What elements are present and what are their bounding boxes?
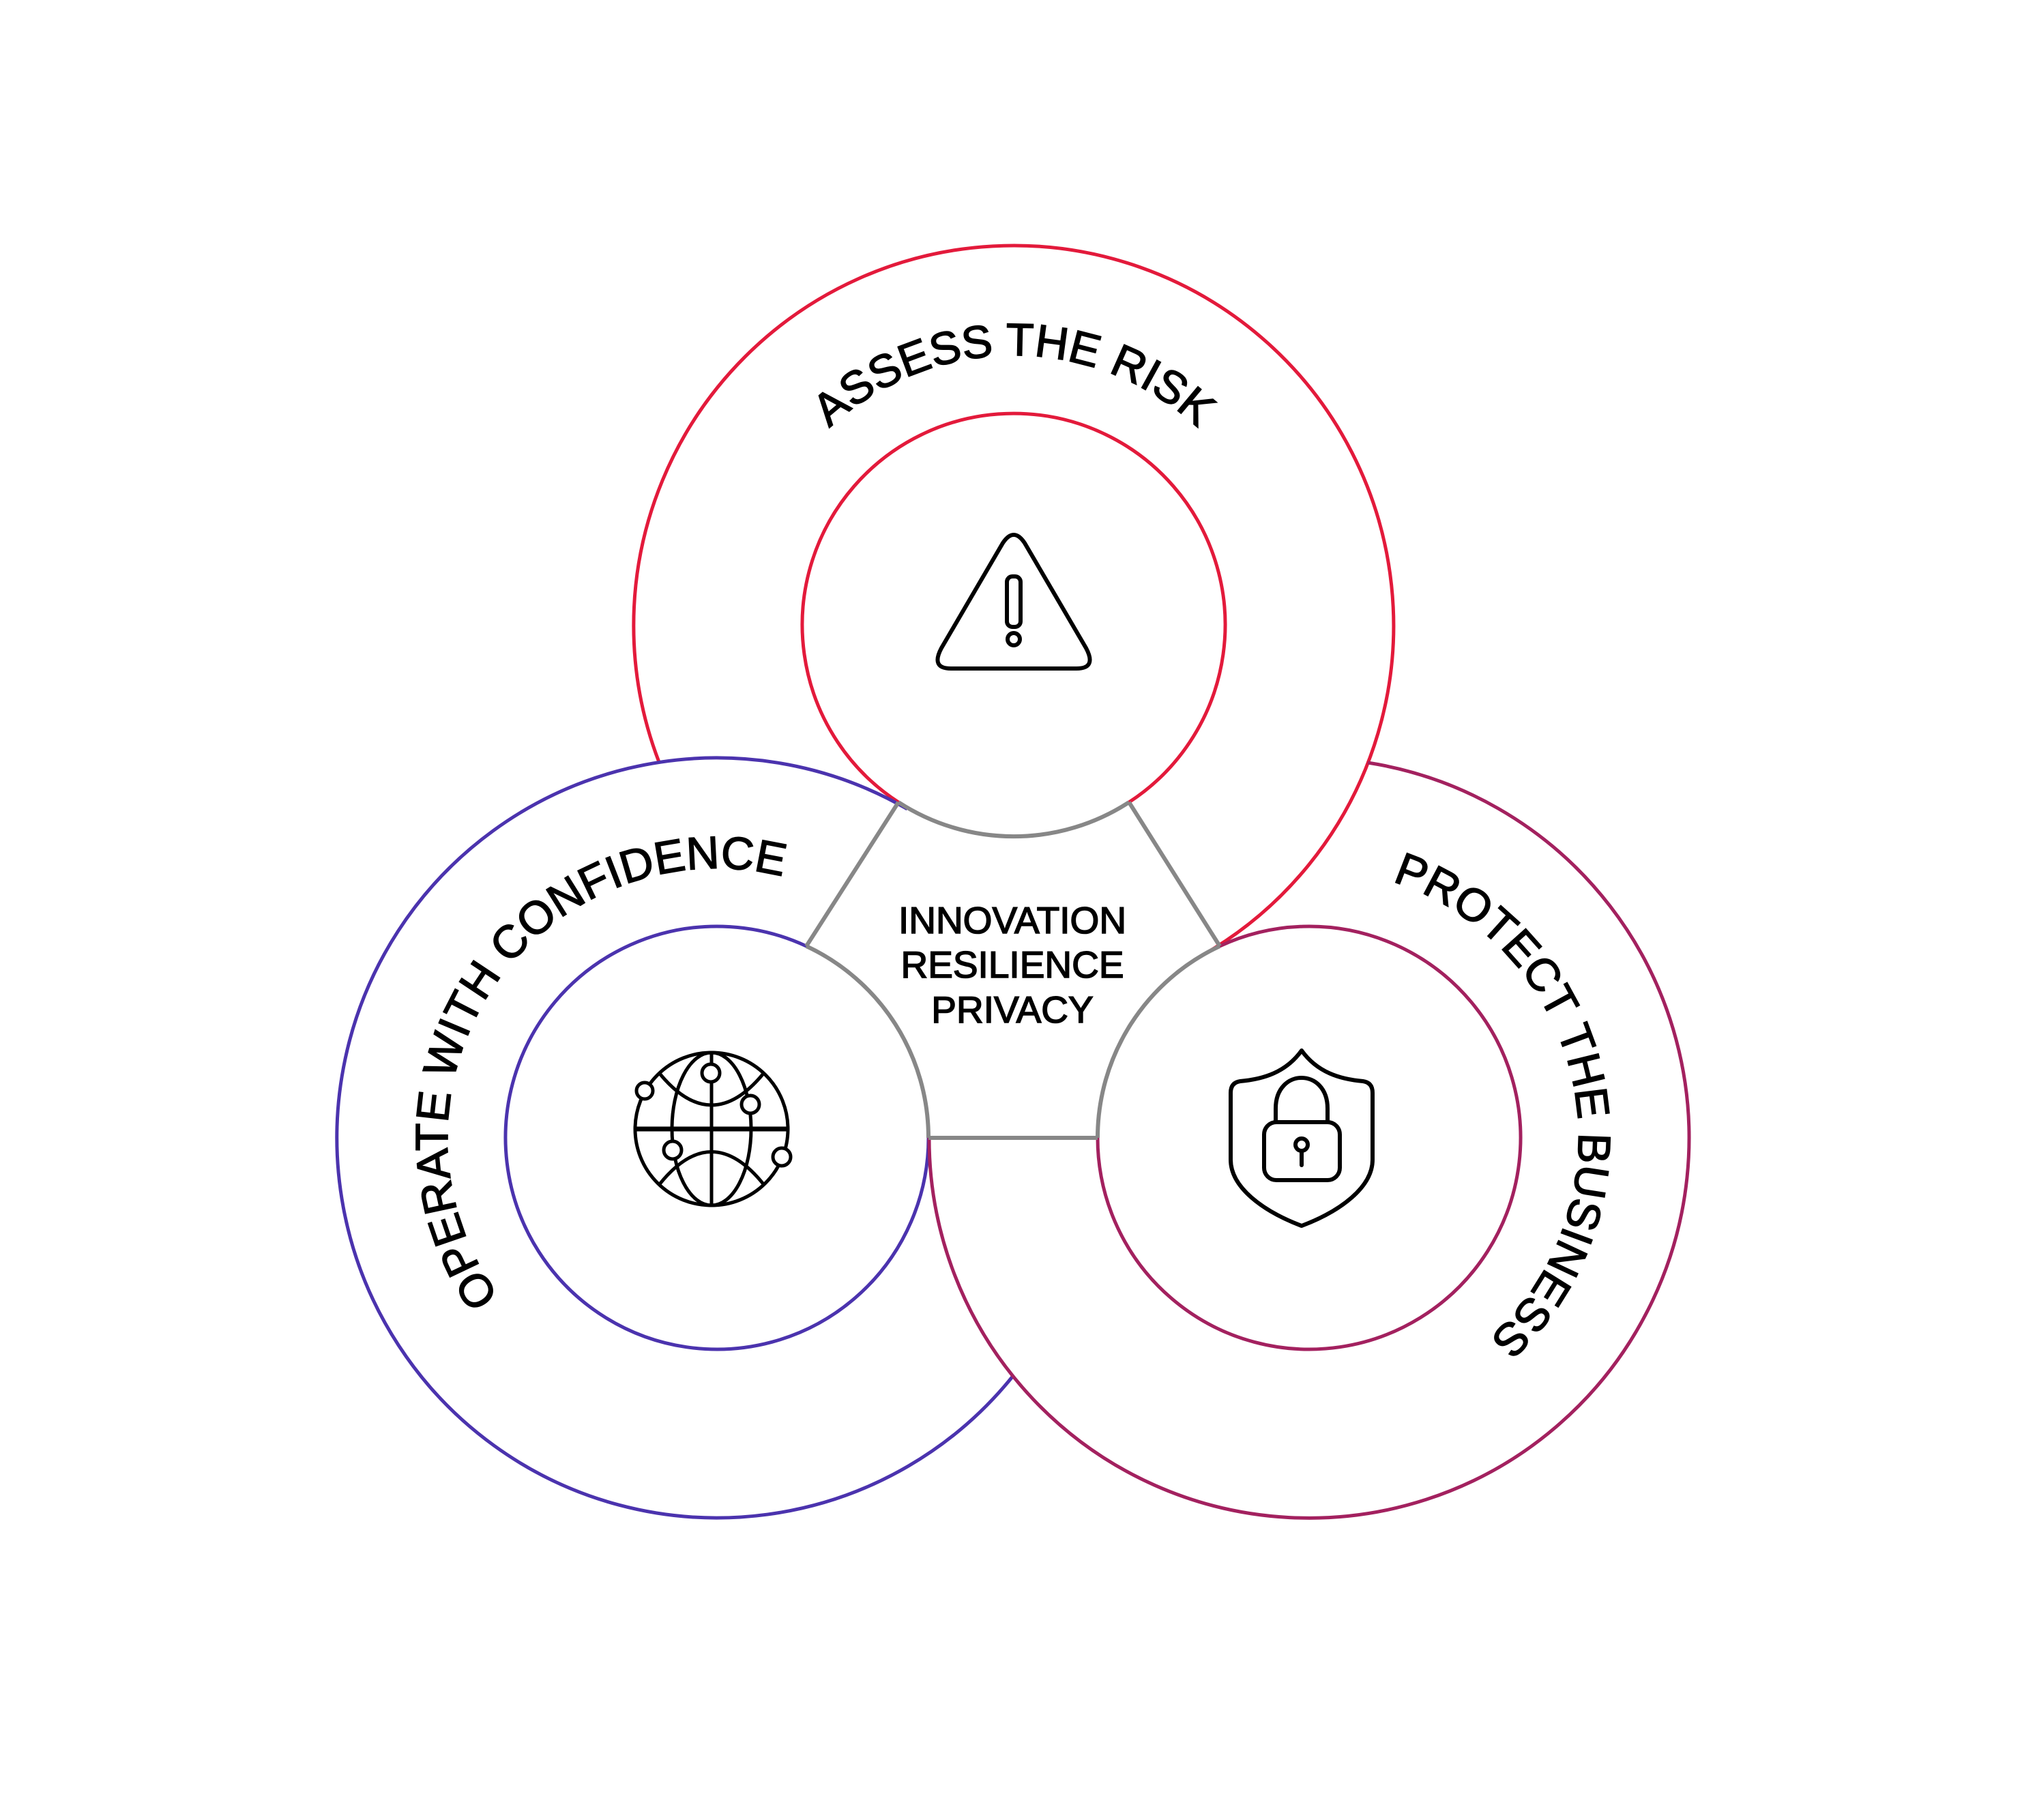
icon: shield with padlock [1231, 1051, 1373, 1226]
ring: operate with confidence (blue) [337, 758, 1013, 1518]
center text block: INNOVATION [898, 899, 1126, 941]
center text block [898, 899, 1126, 1031]
ring: assess the risk (red) [634, 246, 1394, 954]
center text block: RESILIENCE [900, 943, 1124, 986]
heading: OPERATE WITH CONFIDENCE: OPERATE WITH CONFIDENCE [415, 836, 787, 1308]
ring: protect the business (magenta) [929, 763, 1689, 1518]
icon: globe with nodes [635, 1053, 791, 1205]
icon: warning triangle [937, 535, 1090, 669]
heading: ASSESS THE RISK: ASSESS THE RISK [819, 323, 1218, 429]
heading: PROTECT THE BUSINESS: PROTECT THE BUSINESS [1394, 853, 1611, 1356]
center text block: PRIVACY [931, 988, 1094, 1031]
center frame: gray connectors [806, 802, 1220, 1138]
